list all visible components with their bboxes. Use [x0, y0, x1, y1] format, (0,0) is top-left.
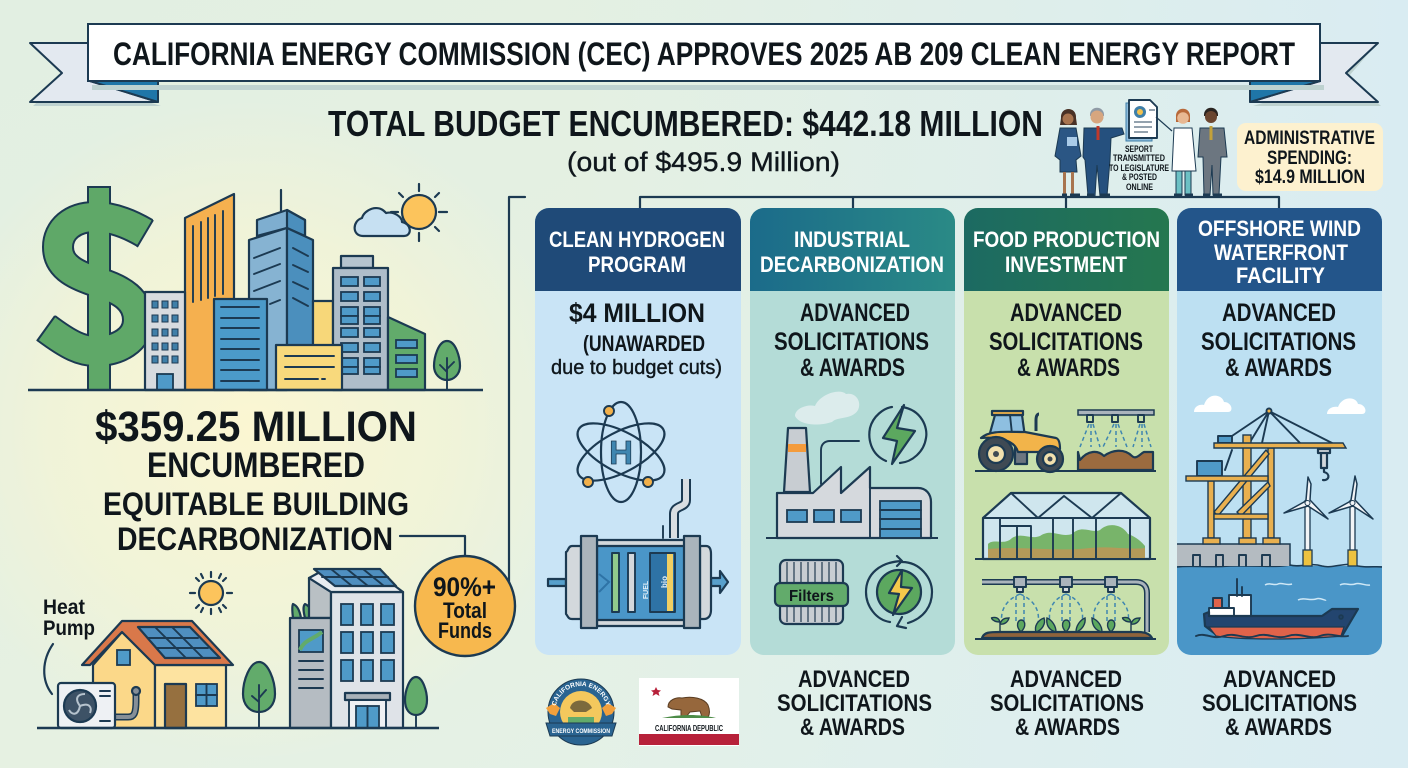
panel body text [551, 298, 722, 379]
total budget heading: TOTAL BUDGET ENCUMBERED: $442.18 MILLION [328, 103, 1043, 144]
panel header: INDUSTRIAL [794, 227, 910, 252]
building: grey left block [145, 292, 185, 390]
label: heat pump: Pump [43, 617, 95, 640]
panel body text [774, 299, 929, 382]
footer text: industrial decarbonization: & AWARDS [800, 714, 905, 741]
logo: agency seal: ENERGY COMMISSION [552, 729, 610, 735]
icon: filters [775, 560, 848, 624]
icon: drip irrigation with seedlings [975, 577, 1156, 639]
icon: lightning recycle circle [869, 405, 926, 464]
figure: scientist in white coat [1172, 109, 1196, 195]
panel body text: SOLICITATIONS [989, 328, 1143, 356]
icon: office building with solar roof [290, 569, 403, 728]
footer text: industrial decarbonization: SOLICITATIONS [777, 690, 932, 717]
panel header: PROGRAM [588, 252, 686, 277]
ground line [28, 389, 483, 391]
icon: hydrogen atom: H [609, 434, 633, 471]
report caption: TO LEGISLATURE [1109, 163, 1169, 173]
panel header: OFFSHORE WIND [1198, 216, 1361, 241]
panel header [535, 208, 741, 291]
panel body text: $4 MILLION [569, 298, 705, 328]
icon: small sun [190, 572, 232, 614]
footer text: industrial decarbonization [777, 666, 932, 741]
panel: clean hydrogen program [535, 208, 741, 655]
icon: report document [1126, 100, 1157, 141]
logo: California flag: CALIFORNIA DEPUBLIC [655, 724, 723, 733]
footer text: industrial decarbonization: ADVANCED [798, 666, 910, 693]
callout: administrative spending [1237, 123, 1383, 191]
panel body text: SOLICITATIONS [1201, 328, 1356, 356]
report caption [1109, 144, 1169, 192]
footer text: offshore wind: & AWARDS [1225, 714, 1332, 741]
building: blue front block [214, 299, 267, 390]
footer text: offshore wind [1202, 666, 1357, 741]
panel body text: ADVANCED [1222, 299, 1336, 327]
panel header [750, 208, 955, 291]
panel body text [989, 299, 1143, 382]
icon: tree [434, 341, 460, 390]
left funding headline [95, 403, 417, 557]
icon: house with solar panels [82, 621, 233, 728]
title banner [30, 24, 1381, 106]
report caption: & POSTED [1122, 172, 1157, 182]
icon: greenhouse [975, 493, 1156, 559]
panel body text: ADVANCED [800, 299, 910, 327]
logo: agency seal: CALIFORNIA ENERGY [552, 682, 611, 706]
panel header [1177, 208, 1382, 291]
figure: woman in blue suit [1055, 109, 1081, 195]
icon: tractor [975, 411, 1156, 472]
panel body text: (UNAWARDED [583, 331, 705, 356]
panel body text: ADVANCED [1010, 299, 1122, 327]
total budget heading: (out of $495.9 Million) [567, 147, 840, 177]
logo: California flag [639, 678, 739, 746]
building: slate grid tower [333, 256, 388, 390]
left funding headline: DECARBONIZATION [117, 521, 393, 557]
icon: wind turbines [1284, 476, 1373, 566]
callout: administrative spending: $14.9 MILLION [1255, 167, 1365, 188]
panel header: WATERFRONT [1214, 240, 1348, 265]
callout: 90% of total funds: Total [443, 598, 487, 623]
panel header: DECARBONIZATION [760, 252, 944, 277]
building: yellow back block [313, 301, 333, 347]
footer text: offshore wind: SOLICITATIONS [1202, 690, 1357, 717]
report caption: ONLINE [1126, 182, 1153, 192]
connector lines to programme panels [400, 197, 1279, 584]
icon: dollar sign [37, 187, 153, 390]
left funding headline: $359.25 MILLION [95, 403, 417, 451]
icon: harbour water [1177, 564, 1382, 656]
panel: food production investment [964, 208, 1169, 655]
panel body text: due to budget cuts) [551, 357, 722, 379]
building: green block [388, 317, 425, 390]
icon: sky clouds [1194, 396, 1365, 414]
icon: fuel cell [548, 479, 728, 628]
panel: industrial decarbonization [750, 208, 955, 655]
icon: tree [243, 662, 275, 728]
icon: officials with report [1055, 100, 1227, 196]
footer text: food production: ADVANCED [1010, 666, 1122, 693]
figure: man in grey suit [1198, 108, 1227, 195]
label: heat pump [43, 596, 95, 694]
logo: agency seal [545, 678, 617, 746]
ground line [37, 727, 439, 729]
icon: energy recycling [866, 556, 932, 628]
panel body text: SOLICITATIONS [774, 328, 929, 356]
panel body text: & AWARDS [1017, 354, 1120, 382]
panel header: CLEAN HYDROGEN [549, 227, 725, 252]
panel header [964, 208, 1169, 291]
icon: small tree [405, 677, 427, 728]
left funding headline: EQUITABLE BUILDING [103, 486, 409, 522]
icon: fuel cell: bio [660, 576, 669, 588]
panel: offshore wind waterfront facility [1177, 208, 1382, 656]
icon: cargo ship [1196, 579, 1370, 639]
icon: crane and pier [1177, 408, 1346, 566]
icon: cloud [355, 208, 410, 236]
callout: 90% of total funds: 90%+ [433, 572, 496, 602]
figure: man in navy suit [1083, 108, 1124, 196]
pointer stick [1156, 117, 1172, 131]
footer text: food production: SOLICITATIONS [990, 690, 1144, 717]
building: yellow front block [276, 345, 342, 390]
icon: sun [391, 184, 447, 241]
icon: hydrogen atom [569, 402, 673, 502]
left funding headline: ENCUMBERED [147, 446, 365, 485]
report caption: TRANSMITTED [1113, 153, 1165, 163]
icon: city skyline with dollar sign [28, 184, 483, 390]
icon: overhead irrigation and soil [1078, 410, 1154, 470]
total budget heading [328, 103, 1043, 177]
icon: factory with emissions cloud [766, 392, 938, 538]
icon: heat pump unit [58, 683, 140, 728]
callout: administrative spending: SPENDING: [1267, 148, 1352, 169]
building: tall blue tower [249, 190, 313, 390]
panel header: INVESTMENT [1005, 252, 1127, 277]
panel body text: & AWARDS [800, 354, 905, 382]
panel header: FACILITY [1236, 263, 1325, 288]
callout: 90% of total funds: Funds [438, 618, 492, 643]
panel body text: & AWARDS [1225, 354, 1332, 382]
panel body text [1201, 299, 1356, 382]
icon: fuel cell: FUEL [643, 580, 650, 599]
footer text: food production: & AWARDS [1015, 714, 1120, 741]
icon: filters: Filters [789, 588, 834, 605]
building: orange tower [185, 194, 234, 390]
footer text: food production [990, 666, 1144, 741]
report caption: SEPORT [1125, 144, 1153, 154]
label: heat pump: Heat [43, 596, 85, 619]
panel header: FOOD PRODUCTION [973, 227, 1160, 252]
callout: 90% of total funds [415, 556, 515, 656]
callout: administrative spending: ADMINISTRATIVE [1244, 128, 1375, 149]
footer text: offshore wind: ADVANCED [1223, 666, 1336, 693]
